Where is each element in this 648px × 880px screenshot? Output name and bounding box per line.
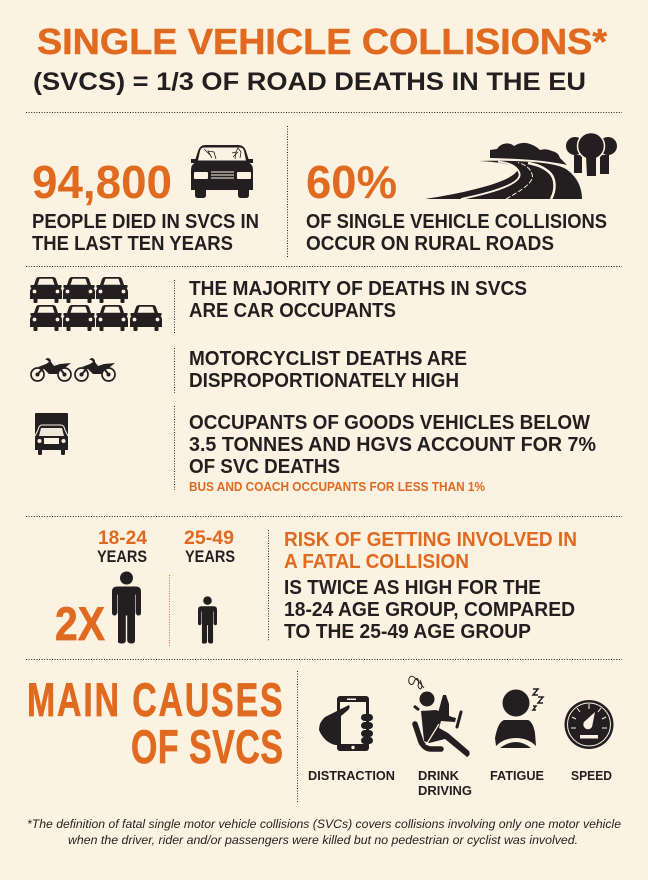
- icon: short person: [198, 596, 217, 644]
- panel: car occupants: [30, 277, 527, 331]
- note: bus and coach: BUS AND COACH OCCUPANTS FOR LESS THAN 1%: [189, 480, 485, 494]
- label: 25-49 years: 25-49: [184, 528, 234, 549]
- label: drink driving: DRINK: [418, 768, 460, 783]
- statistic: 60%: 60%: [306, 156, 397, 208]
- text: risk explanation: IS TWICE AS HIGH FOR THE: [284, 576, 541, 599]
- footnote: *The definition of fatal single motor vehicle collisions (SVCs) covers collisions involving only one motor vehicle: [27, 819, 621, 831]
- footnote: when the driver, rider and/or passengers were killed but no pedestrian or cyclist was involved.: [68, 835, 578, 847]
- icon: truck: [35, 413, 68, 455]
- icon: seven cars: [30, 277, 162, 331]
- icon: sleeping driver: [495, 689, 543, 748]
- text: rural roads: OF SINGLE VEHICLE COLLISIONS: [306, 210, 607, 233]
- panel: 60% rural roads: OCCUR ON RURAL ROADS: [306, 232, 554, 255]
- panel: risk text: [284, 528, 577, 643]
- icon: speedometer: [564, 700, 614, 749]
- label: drink driving: DRIVING: [418, 783, 472, 798]
- text: goods vehicles: OCCUPANTS OF GOODS VEHICLES BELOW: [189, 411, 591, 434]
- label: 18-24 years: YEARS: [97, 547, 147, 566]
- statistic: 2X: 2X: [55, 597, 105, 650]
- panel: goods vehicles: 3.5 TONNES AND HGVS ACCOUNT FOR 7%: [189, 433, 596, 456]
- cause: speed: [564, 700, 614, 783]
- panel: motorcyclists: DISPROPORTIONATELY HIGH: [189, 369, 459, 392]
- title: SINGLE VEHICLE COLLISIONS*: [37, 21, 607, 62]
- label: drink driving: [418, 768, 472, 798]
- heading: main causes: MAIN CAUSES: [27, 674, 283, 726]
- panel: 94,800 deaths: THE LAST TEN YEARS: [32, 232, 233, 255]
- heading: main causes: OF SVCS: [131, 721, 283, 773]
- label: fatigue: FATIGUE: [490, 768, 544, 783]
- icon: crashed car: [191, 145, 253, 198]
- panel: age comparison: [55, 528, 235, 650]
- panel: motorcyclists: [31, 347, 467, 392]
- icon: two motorcycles: [31, 358, 115, 381]
- panel: 60% rural roads: [306, 132, 617, 255]
- label: 18-24 years: [97, 528, 147, 566]
- panel: risk text: TO THE 25-49 AGE GROUP: [284, 620, 531, 643]
- icon: rural road and trees: [425, 132, 617, 199]
- panel: car occupants: ARE CAR OCCUPANTS: [189, 299, 396, 322]
- panel: risk text: 18-24 AGE GROUP, COMPARED: [284, 598, 575, 621]
- cause: distraction: [308, 696, 395, 783]
- panel: goods vehicles: [35, 411, 596, 494]
- label: distraction: DISTRACTION: [308, 768, 395, 783]
- footnote: [27, 819, 621, 847]
- heading: main causes: [27, 674, 283, 773]
- heading: risk: RISK OF GETTING INVOLVED IN: [284, 528, 577, 551]
- cause: drink driving: [409, 676, 472, 798]
- icon: hand holding phone: [319, 696, 373, 751]
- panel: risk text: A FATAL COLLISION: [284, 550, 469, 573]
- panel: goods vehicles: OF SVC DEATHS: [189, 455, 340, 478]
- label: 25-49 years: [184, 528, 235, 566]
- text: people died: PEOPLE DIED IN SVCS IN: [32, 210, 259, 233]
- statistic: 94,800: 94,800: [32, 156, 172, 208]
- subtitle: (SVCS) = 1/3 OF ROAD DEATHS IN THE EU: [33, 68, 586, 96]
- label: speed: SPEED: [571, 768, 612, 783]
- cause: fatigue: [490, 689, 544, 783]
- text: motorcyclists: MOTORCYCLIST DEATHS ARE: [189, 347, 467, 370]
- label: 18-24 years: 18-24: [98, 528, 147, 549]
- text: car occupants: THE MAJORITY OF DEATHS IN SVCS: [189, 277, 527, 300]
- label: 25-49 years: YEARS: [185, 547, 235, 566]
- icon: drunk driver: [409, 676, 470, 757]
- panel: 94,800 deaths: [32, 145, 259, 255]
- icon: tall person: [112, 572, 141, 644]
